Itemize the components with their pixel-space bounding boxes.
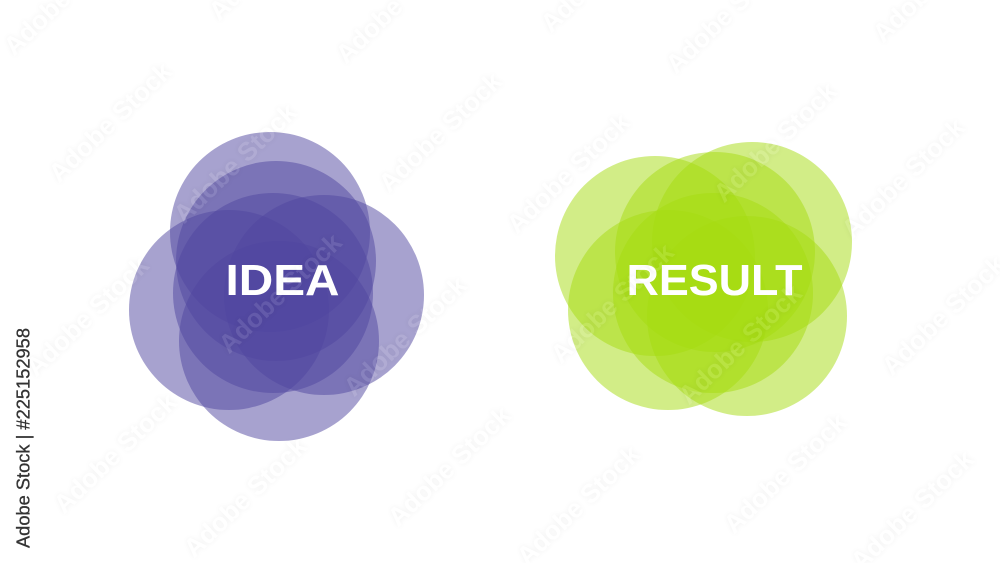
watermark pattern: Adobe Stock [167, 97, 303, 229]
watermark pattern: Adobe Stock [19, 250, 155, 382]
stock id caption: Adobe Stock | #225152958 [12, 328, 34, 548]
watermark pattern: Adobe Stock [544, 237, 680, 369]
watermark pattern: Adobe Stock [672, 278, 808, 410]
panel: result overlapping circles [555, 142, 852, 416]
watermark pattern: Adobe Stock [212, 227, 348, 359]
heading: idea: IDEA [226, 256, 340, 305]
watermark pattern: Adobe Stock [42, 56, 178, 188]
heading: result: RESULT [626, 256, 803, 305]
watermark pattern: Adobe Stock [835, 112, 971, 244]
watermark pattern: Adobe Stock [381, 400, 517, 532]
watermark pattern: Adobe Stock [47, 387, 183, 519]
watermark pattern: Adobe Stock [500, 107, 636, 239]
watermark pattern: Adobe Stock [372, 66, 508, 198]
watermark pattern: Adobe Stock [337, 270, 473, 402]
watermark pattern: Adobe Stock [707, 76, 843, 208]
panel: idea overlapping circles [129, 132, 424, 441]
watermark pattern: Adobe Stock [177, 431, 313, 563]
watermark pattern: Adobe Stock [717, 407, 853, 539]
